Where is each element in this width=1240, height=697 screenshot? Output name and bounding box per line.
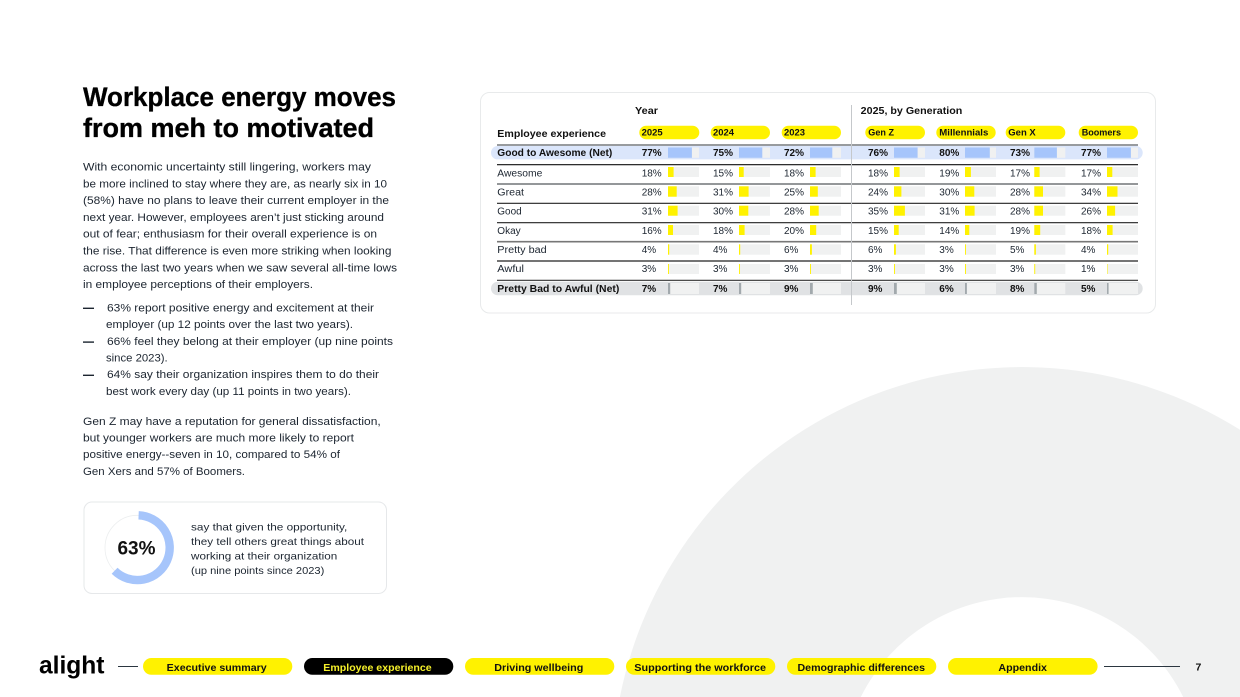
row: Good to Awesome (Net): 77% xyxy=(642,148,662,159)
bullet list: since 2023). xyxy=(106,352,168,364)
bullet list xyxy=(83,302,393,398)
row: Pretty Bad to Awful (Net): 9% xyxy=(784,284,799,295)
row: Awesome: 18% xyxy=(784,168,804,180)
row: Great: 30% xyxy=(939,188,959,198)
row: Okay: 19% xyxy=(1010,226,1030,237)
intro paragraph: (58%) have no plans to leave their current employer in the xyxy=(83,195,389,207)
intro paragraph xyxy=(83,162,397,291)
row: Okay: 16% xyxy=(642,226,662,237)
column group heading: Year: Year xyxy=(635,106,658,117)
title: from meh to motivated xyxy=(83,113,374,143)
Gen Z paragraph: but younger workers are much more likely to report xyxy=(83,432,355,444)
row: Good xyxy=(497,206,1138,218)
row: Good: 30% xyxy=(713,206,733,218)
nav: Appendix: Appendix xyxy=(998,662,1047,674)
row: Awful: 3% xyxy=(1010,264,1025,275)
intro paragraph: be more inclined to stay where they are, as nearly six in 10 xyxy=(83,178,387,190)
row: Good to Awesome (Net) xyxy=(497,148,1138,159)
row: Pretty Bad to Awful (Net) xyxy=(497,283,1138,295)
column header pills: Millennials xyxy=(939,128,988,138)
nav: Supporting the workforce: Supporting the workforce xyxy=(634,662,766,674)
bullet list: 66% feel they belong at their employer (up nine points xyxy=(107,336,393,348)
row: Great: 28% xyxy=(1010,188,1030,198)
row: Awesome: 18% xyxy=(868,168,888,180)
row: Awesome: 17% xyxy=(1010,168,1030,180)
nav: Employee experience (active) xyxy=(304,658,453,675)
row: Awesome xyxy=(497,167,1138,180)
row: Pretty bad: 3% xyxy=(939,245,954,256)
column header pills: Gen Z xyxy=(868,128,894,138)
row: Awful: 1% xyxy=(1081,264,1096,275)
intro paragraph: across the last two years when we saw several all-time lows xyxy=(83,262,397,274)
callout text: (up nine points since 2023) xyxy=(191,565,324,577)
row: Good to Awesome (Net): Good to Awesome (Net) xyxy=(497,148,612,159)
Gen Z paragraph xyxy=(83,416,381,478)
row: Great: 24% xyxy=(868,188,888,198)
column header pills: Boomers xyxy=(1082,128,1121,138)
page number: 7 xyxy=(1196,662,1202,674)
nav: Supporting the workforce xyxy=(626,658,775,675)
row: Pretty bad: 5% xyxy=(1010,245,1025,256)
intro paragraph: in employee perceptions of their employers. xyxy=(83,279,313,291)
row: Awesome: 15% xyxy=(713,168,733,180)
column header pills: 2023 xyxy=(784,128,805,138)
intro paragraph: next year. However, employees aren’t just sticking around xyxy=(83,212,384,224)
row: Pretty Bad to Awful (Net): Pretty Bad to Awful (Net) xyxy=(497,284,619,295)
row: Good to Awesome (Net): 77% xyxy=(1081,148,1101,159)
callout text: say that given the opportunity, xyxy=(191,522,347,534)
row: Great: Great xyxy=(497,188,524,198)
row: Awful: 3% xyxy=(784,264,799,275)
row: Good to Awesome (Net): 72% xyxy=(784,148,804,159)
row: Good: 28% xyxy=(784,206,804,218)
row: Awful: 3% xyxy=(642,264,656,275)
row: Good to Awesome (Net): 80% xyxy=(939,148,959,159)
row: Okay: 14% xyxy=(939,226,959,237)
row: Good: 28% xyxy=(1010,206,1030,218)
row: Awful: 3% xyxy=(939,264,954,275)
panel: employee experience table xyxy=(480,92,1156,313)
column group heading: 2025, by Generation: 2025, by Generation xyxy=(861,106,962,117)
nav: Appendix xyxy=(948,658,1098,675)
row: Good to Awesome (Net): 76% xyxy=(868,148,888,159)
row: Great: 28% xyxy=(642,188,662,198)
nav: Driving wellbeing: Driving wellbeing xyxy=(494,662,583,674)
column header pills: 2025 xyxy=(642,128,663,138)
callout text xyxy=(190,522,364,577)
background arc xyxy=(620,367,1240,697)
row header: Employee experience: Employee experience xyxy=(497,129,606,140)
row: Pretty bad: 6% xyxy=(868,245,883,256)
row: Okay: 15% xyxy=(868,226,888,237)
callout panel xyxy=(84,502,386,594)
footer navigation xyxy=(143,658,1098,675)
Gen Z paragraph: Gen Xers and 57% of Boomers. xyxy=(83,466,245,478)
row: Pretty bad: 4% xyxy=(1081,245,1096,256)
row: Awesome: 17% xyxy=(1081,168,1101,180)
row: Awesome: 18% xyxy=(642,168,662,180)
row: Good: Good xyxy=(497,206,522,218)
row: Awful: Awful xyxy=(497,264,524,275)
row: Good: 35% xyxy=(868,206,888,218)
intro paragraph: With economic uncertainty still lingering, workers may xyxy=(83,162,371,174)
intro paragraph: out of fear; enthusiasm for their overall experience is on xyxy=(83,228,377,240)
nav: Executive summary xyxy=(143,658,292,675)
Gen Z paragraph: positive energy--seven in 10, compared to 54% of xyxy=(83,449,341,461)
row: Awesome: Awesome xyxy=(497,168,543,180)
donut chart 63%: 63% xyxy=(118,538,156,560)
row: Good to Awesome (Net): 75% xyxy=(713,148,733,159)
row: Pretty Bad to Awful (Net): 7% xyxy=(713,284,728,295)
row: Good: 31% xyxy=(642,206,662,218)
row: Good: 31% xyxy=(939,206,959,218)
row: Pretty Bad to Awful (Net): 9% xyxy=(868,284,883,295)
callout text: working at their organization xyxy=(190,550,337,562)
row: Pretty bad: 4% xyxy=(642,245,656,256)
row: Awesome: 19% xyxy=(939,168,959,180)
title: Workplace energy moves xyxy=(83,82,396,112)
column header pills xyxy=(639,126,1138,139)
row: Good to Awesome (Net): 73% xyxy=(1010,148,1030,159)
column header pills: Gen X xyxy=(1008,128,1037,138)
row: Pretty Bad to Awful (Net): 8% xyxy=(1010,284,1025,295)
row: Pretty Bad to Awful (Net): 6% xyxy=(939,284,954,295)
donut chart 63% xyxy=(105,515,170,580)
callout text: they tell others great things about xyxy=(191,536,364,548)
row: Awful: 3% xyxy=(713,264,728,275)
bullet list: 63% report positive energy and excitement at their xyxy=(107,302,374,314)
row: Pretty bad: 6% xyxy=(784,245,799,256)
row: Pretty bad: 4% xyxy=(713,245,728,256)
nav: Demographic differences: Demographic differences xyxy=(798,662,925,674)
row: Great: 25% xyxy=(784,188,804,198)
row: Awful: 3% xyxy=(868,264,883,275)
nav: Demographic differences xyxy=(787,658,936,675)
row: Pretty bad: Pretty bad xyxy=(497,245,547,256)
nav: Driving wellbeing xyxy=(465,658,614,675)
row: Pretty bad xyxy=(497,244,1138,256)
row: Great: 31% xyxy=(713,188,733,198)
logo: alight: alight xyxy=(39,652,105,680)
row: Okay: 20% xyxy=(784,226,804,237)
nav: Employee experience (active): Employee experience xyxy=(323,662,432,674)
nav: Executive summary: Executive summary xyxy=(167,662,267,674)
row: Okay xyxy=(497,225,1138,237)
row: Pretty Bad to Awful (Net): 7% xyxy=(642,284,656,295)
row: Awful xyxy=(497,264,1138,275)
bullet list: best work every day (up 11 points in two years). xyxy=(106,386,351,398)
column header pills: 2024 xyxy=(713,128,735,138)
intro paragraph: the rise. That difference is even more striking when looking xyxy=(83,246,392,258)
row: Okay: 18% xyxy=(713,226,733,237)
row: Pretty Bad to Awful (Net): 5% xyxy=(1081,284,1096,295)
title xyxy=(83,82,396,143)
row: Great xyxy=(497,186,1138,198)
bullet list: 64% say their organization inspires them to do their xyxy=(107,369,379,381)
row: Good: 26% xyxy=(1081,206,1101,218)
Gen Z paragraph: Gen Z may have a reputation for general dissatisfaction, xyxy=(83,416,381,428)
row: Okay: 18% xyxy=(1081,226,1101,237)
row: Okay: Okay xyxy=(497,226,521,237)
bullet list: employer (up 12 points over the last two years). xyxy=(106,319,353,331)
row: Great: 34% xyxy=(1081,188,1101,198)
